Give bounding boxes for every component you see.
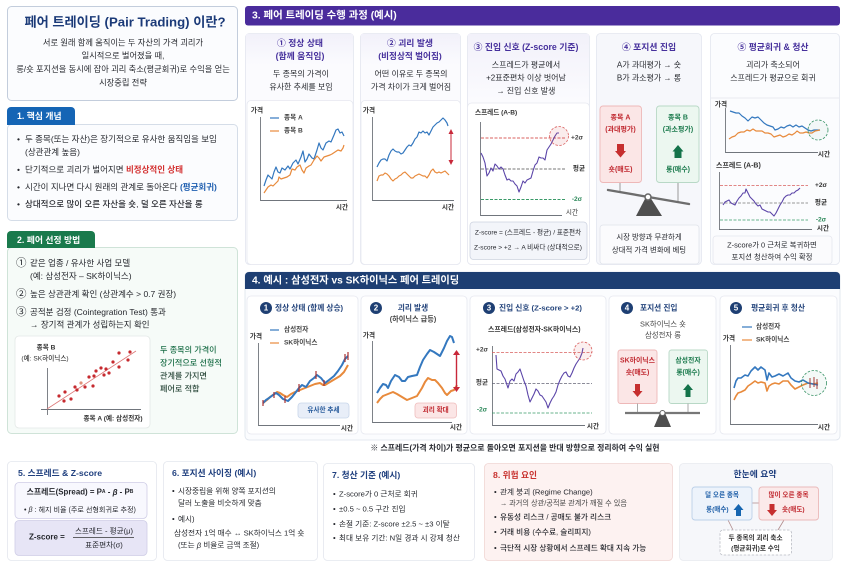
- chart: step 1: 종목 B: [284, 126, 303, 134]
- exit rule list: ±0.5 ~ 0.5 구간 진입: [339, 504, 406, 514]
- step 4 text: A가 과대평가 → 숏: [617, 60, 681, 70]
- step 5 title: ⑤ 평균회귀 & 청산: [737, 41, 809, 52]
- example step 4: [609, 296, 716, 434]
- long box: [656, 106, 699, 182]
- chart: example 3 spread: 평균: [476, 378, 488, 386]
- risk list: → 과거의 상관/공적분 관계가 깨질 수 있음: [500, 498, 627, 508]
- chart: example 5: 가격: [723, 334, 735, 342]
- example step 1: 시간: [341, 424, 353, 432]
- risk list: •: [494, 528, 497, 536]
- heading: section 4: 4. 예시 : 삼성전자 vs SK하이닉스 페어 트레이딩: [252, 274, 459, 286]
- example step 5: [720, 296, 837, 434]
- number badge 5: 5: [734, 304, 739, 312]
- example step 5 title: 평균회귀 후 청산: [751, 302, 805, 312]
- exit rule list: 손절 기준: Z-score ±2.5 ~ ±3 이탈: [339, 518, 450, 528]
- box: short leader: [759, 487, 818, 520]
- chart: step 3 spread: 스프레드 (A-B): [475, 108, 517, 116]
- position sizing text: 예시): [178, 514, 195, 524]
- example step 1 title: 정상 상태 (함께 상승): [275, 302, 344, 312]
- example step 3: [470, 296, 606, 434]
- spread formula box: • β : 헤지 비율 (주로 선형회귀로 추정): [24, 505, 136, 514]
- bullet list: 상대적으로 많이 오른 자산을 숏, 덜 오른 자산을 롱: [25, 199, 203, 209]
- chart: example 3 spread: 스프레드(삼성전자-SK하이닉스): [488, 324, 581, 334]
- summary connectors: [728, 503, 784, 530]
- chart: step 1: 시간: [336, 202, 348, 212]
- example step 2: 시간: [450, 422, 462, 432]
- chart: step 5 spread: 시간: [817, 224, 829, 232]
- box: profit from convergence: (평균회귀)로 수익: [731, 544, 780, 552]
- bullet list: [17, 134, 217, 209]
- chart: scatter plot: 종목 A (예: 삼성전자): [83, 414, 143, 422]
- box: profit from convergence: 두 종목의 괴리 축소: [728, 533, 783, 542]
- long box: 종목 B: [668, 114, 688, 122]
- z-score formula box: Z-score = (스프레드 - 평균) / 표준편차: [475, 228, 581, 236]
- step 3 text: [486, 60, 567, 96]
- z-score formula box: [470, 222, 587, 260]
- step 1 text: 유사한 추세를 보임: [269, 82, 333, 92]
- chart: example 5: 시간: [818, 422, 830, 432]
- step 2 title: [378, 37, 442, 61]
- arrow: divergence widening: [453, 350, 460, 392]
- risk list: 유동성 리스크 / 공매도 불가 리스크: [500, 512, 611, 522]
- chart: step 3 spread: 시간: [566, 208, 578, 216]
- box: buy laggard: [692, 487, 752, 520]
- selection steps: → 장기적 관계가 성립하는지 확인: [30, 320, 150, 330]
- arrow: divergence: [448, 129, 454, 165]
- step 1 text: [269, 68, 333, 92]
- position sizing text: 삼성전자 1억 매수 ↔ SK하이닉스 1억 숏: [174, 528, 304, 538]
- step 1 title: ① 정상 상태: [277, 37, 323, 48]
- heading 6: 6. 포지션 사이징 (예시): [172, 467, 256, 478]
- risk list: 극단적 시장 상황에서 스프레드 확대 지속 가능: [500, 542, 646, 552]
- short box: 숏(매도): [626, 368, 649, 376]
- example step 1: [247, 296, 358, 434]
- panel: step 3 entry signal: [468, 34, 590, 264]
- selection steps: 공적분 검정 (Cointegration Test) 통과: [30, 307, 166, 317]
- step 3 text: → 진입 신호 발생: [497, 86, 555, 96]
- example step 2 title: (하이닉스 급등): [390, 314, 437, 324]
- heading: core concept: [7, 107, 75, 125]
- panel: section 4 example: [245, 272, 840, 440]
- chart: step 3 spread: 평균: [573, 164, 585, 172]
- long box: [669, 350, 708, 404]
- panel: 6 position sizing: [164, 462, 318, 560]
- step 2 text: 어떤 이유로 두 종목의: [375, 68, 447, 78]
- chart: scatter plot: 종목 B: [37, 344, 56, 352]
- selection steps: ①: [16, 257, 27, 269]
- bullet list: •: [17, 199, 20, 209]
- box: buy laggard: 덜 오른 종목: [705, 490, 739, 499]
- intro text: [16, 38, 230, 88]
- heading 8: 8. 위험 요인: [493, 469, 537, 480]
- step 3 text: +2표준편차 이상 벗어남: [486, 72, 567, 82]
- chart: step 5 prices: 가격: [715, 100, 727, 108]
- z-score formula box: [15, 520, 147, 556]
- scatter explanation: 관계를 가지면: [160, 370, 207, 380]
- panel: 1 core concept: [7, 107, 238, 220]
- risk list: 거래 비용 (수수료, 슬리피지): [500, 526, 591, 536]
- selection steps: ③: [16, 306, 27, 318]
- panel: step 4 position: [596, 34, 702, 264]
- step 3 text: 스프레드가 평균에서: [492, 60, 560, 70]
- chart: scatter plot: (예: SK하이닉스): [21, 354, 69, 362]
- chart: example 1: [250, 324, 348, 426]
- chart: example 3 spread: 시간: [587, 422, 599, 430]
- panel: 8 risk factors: [484, 464, 672, 560]
- panel: 5 spread and z-score: [8, 462, 156, 560]
- short box: [600, 106, 642, 182]
- short box: SK하이닉스: [620, 356, 656, 364]
- number badge 3: 3: [487, 304, 492, 312]
- step 4 text: [617, 60, 681, 82]
- chart: example 5: SK하이닉스: [756, 334, 789, 344]
- chart: example 1: 가격: [250, 332, 262, 340]
- long box: (과소평가): [663, 124, 693, 134]
- heading: section 3: 3. 페어 트레이딩 수행 과정 (예시): [252, 8, 397, 22]
- title: 페어 트레이딩 (Pair Trading) 이란?: [24, 14, 226, 30]
- step 5 note: [713, 236, 832, 264]
- chart: example 2: 가격: [363, 330, 375, 340]
- z-score formula box: 스프레드 - 평균(μ): [75, 526, 134, 536]
- chart: step 1: 가격: [251, 106, 263, 114]
- badge: similar trend: 유사한 추세: [307, 405, 340, 414]
- intro text: 롱/숏 포지션을 동시에 잡아 괴리 축소(평균회귀)로 수익을 얻는: [16, 64, 230, 74]
- step 1 title: [276, 37, 324, 61]
- badge: divergence widening: 괴리 확대: [423, 405, 449, 414]
- chart: step 2: 가격: [363, 106, 375, 114]
- chart: step 5 prices: 시간: [818, 150, 830, 158]
- heading: section 4: [245, 272, 840, 289]
- risk list: [494, 486, 646, 552]
- step 5 note: 포지션 청산하여 수익 확정: [732, 252, 812, 262]
- exit rule list: Z-score가 0 근처로 회귀: [339, 488, 418, 498]
- box: short leader: 숏(매도): [782, 504, 805, 514]
- scatter explanation: 페어로 적합: [160, 384, 200, 394]
- panel: step 5 mean reversion: [710, 34, 840, 264]
- risk list: •: [494, 512, 497, 522]
- short box: [618, 350, 657, 404]
- intro text: 서로 원래 함께 움직이는 두 자산의 가격 괴리가: [43, 38, 204, 48]
- long box: 롱(매수): [676, 368, 700, 376]
- step 5 note: Z-score가 0 근처로 복귀하면: [727, 240, 817, 250]
- number badge 1: 1: [264, 304, 269, 312]
- chart: step 1: 종목 A: [284, 114, 303, 122]
- intro text: 시장중립 전략: [99, 78, 147, 88]
- chart: example 1: 삼성전자: [284, 324, 308, 334]
- bullet list: •: [17, 182, 20, 192]
- chart: example 3 spread: [476, 324, 599, 430]
- panel: summary: [680, 464, 832, 560]
- chart: example 1: SK하이닉스: [284, 338, 317, 346]
- spread formula box: [15, 482, 147, 518]
- example step 4 text: SK하이닉스 숏: [640, 320, 686, 328]
- balance beam: [608, 182, 689, 216]
- selection steps: [16, 257, 176, 330]
- number badge 4: 4: [625, 304, 630, 312]
- z-score formula box: Z-score =: [29, 532, 65, 542]
- step 1 text: 두 종목의 가격이: [273, 68, 329, 78]
- step 4 text: B가 과소평가 → 롱: [617, 72, 681, 82]
- heading 7: 7. 청산 기준 (예시): [332, 469, 400, 480]
- panel: step 1 normal: [246, 34, 354, 264]
- heading 5: 5. 스프레드 & Z-score: [18, 467, 102, 478]
- step 2 title: ② 괴리 발생: [387, 37, 433, 48]
- position sizing text: (또는 β 비율로 금액 조절): [178, 540, 260, 550]
- panel: 7 exit rules: [324, 464, 474, 560]
- bullet list: 두 종목(또는 자산)은 장기적으로 유사한 움직임을 보임: [25, 134, 217, 144]
- chart: step 5 spread: 스프레드 (A-B): [716, 160, 761, 170]
- chart: example 5: [723, 322, 830, 432]
- exit rule list: •: [333, 504, 336, 514]
- heading: core concept: 1. 핵심 개념: [17, 110, 62, 121]
- short box: 종목 A: [611, 114, 630, 122]
- step 4 title: ④ 포지션 진입: [622, 41, 676, 52]
- summary heading: 한눈에 요약: [734, 468, 776, 479]
- bullet list: •: [17, 134, 20, 144]
- risk list: •: [494, 544, 497, 552]
- bullet list: (상관관계 높음): [25, 147, 80, 157]
- chart: step 1: [247, 100, 353, 264]
- exit rule list: •: [333, 490, 336, 498]
- z-score formula box: 표준편차(σ): [85, 540, 123, 550]
- panel: 2 pair selection: [7, 231, 238, 434]
- chart: step 5 spread: [716, 160, 829, 232]
- box: buy laggard: 롱(매수): [706, 504, 729, 514]
- risk list: •: [494, 488, 497, 496]
- selection steps: ②: [16, 288, 27, 300]
- chart: step 5 spread: +2σ: [815, 182, 828, 189]
- box: profit from convergence: [720, 530, 792, 555]
- chart: example 3 spread: -2σ: [477, 406, 488, 414]
- risk list: 관계 붕괴 (Regime Change): [500, 486, 593, 496]
- example step 3 title: 진입 신호 (Z-score > +2): [499, 302, 582, 312]
- chart: step 2: 시간: [442, 202, 454, 212]
- chart: step 5 spread: 평균: [815, 198, 827, 206]
- exit rule list: 최대 보유 기간: N일 경과 시 강제 청산: [339, 532, 460, 542]
- position sizing text: •: [172, 486, 175, 496]
- scatter explanation: 장기적으로 선형적: [160, 358, 222, 368]
- bullet list: •: [17, 164, 20, 174]
- step 4 note: [600, 225, 699, 264]
- panel: intro title: [8, 6, 238, 100]
- position sizing text: 시장중립을 위해 양쪽 포지션의: [178, 486, 276, 496]
- heading: section 3: [245, 6, 840, 26]
- chart: step 3 spread: [468, 103, 590, 264]
- step 3 title: ③ 진입 신호 (Z-score 기준): [474, 41, 578, 52]
- number badge 2: 2: [374, 304, 379, 312]
- step 2 text: [371, 68, 451, 92]
- exit rule list: •: [333, 534, 336, 542]
- balance beam: [625, 404, 700, 427]
- long box: 롱(매수): [666, 164, 690, 174]
- position sizing text: •: [172, 514, 175, 524]
- chart: step 5 prices: [711, 98, 839, 158]
- short box: 숏(매도): [609, 164, 632, 174]
- position sizing text: 달러 노출을 비슷하게 맞춤: [178, 498, 262, 508]
- chart: example 3 spread: +2σ: [476, 346, 489, 354]
- step 4 note: 시장 방향과 무관하게: [616, 232, 682, 242]
- example step 2: [361, 296, 467, 434]
- step 5 text: [730, 60, 816, 82]
- chart: step 3 spread: -2σ: [572, 196, 583, 203]
- exit rule list: •: [333, 520, 336, 528]
- heading: pair selection: [7, 231, 95, 248]
- panel: step 2 divergence: [360, 34, 460, 264]
- example step 4 text: [640, 320, 686, 340]
- example step 2 title: [390, 302, 437, 324]
- exit rule list: [333, 488, 460, 542]
- chart: step 3 spread: +2σ: [571, 134, 584, 142]
- chart: scatter plot: [15, 336, 150, 428]
- step 2 text: 가격 차이가 크게 벌어짐: [371, 82, 451, 92]
- example step 2 title: 괴리 발생: [398, 302, 428, 312]
- spread formula box: 스프레드(Spread) = PA - β - PB: [27, 486, 134, 496]
- heading: pair selection: 2. 페어 선정 방법: [17, 234, 80, 245]
- chart: example 5: 삼성전자: [756, 322, 780, 330]
- example step 4 text: 삼성전자 롱: [645, 330, 681, 340]
- step 2 title: (비정상적 벌어짐): [378, 50, 442, 61]
- scatter explanation: [160, 344, 222, 394]
- bullet list: 단기적으로 괴리가 벌어지면 비정상적인 상태: [25, 164, 183, 174]
- selection steps: 높은 상관관계 확인 (상관계수 > 0.7 권장): [30, 289, 176, 299]
- z-score formula box: Z-score > +2 → A 비싸다 (상대적으로): [474, 242, 582, 252]
- bullet list: 시간이 지나면 다시 원래의 관계로 돌아온다 (평균회귀): [25, 182, 217, 192]
- note under section 4: ※ 스프레드(가격 차이)가 평균으로 돌아오면 포지션을 반대 방향으로 정리하여 수익 실현: [370, 442, 660, 452]
- box: short leader: 많이 오른 종목: [768, 490, 809, 499]
- chart: step 2: [361, 100, 460, 264]
- chart: step 5 spread: -2σ: [816, 216, 827, 224]
- step 5 text: 스프레드가 평균으로 회귀: [730, 72, 816, 82]
- example step 4 title: 포지션 진입: [640, 302, 678, 312]
- step 4 note: 상대적 가격 변화에 베팅: [612, 246, 686, 254]
- step 5 text: 괴리가 축소되어: [746, 60, 800, 70]
- short box: (과대평가): [605, 124, 636, 134]
- intro text: 일시적으로 벌어졌을 때,: [82, 50, 164, 60]
- selection steps: 같은 업종 / 유사한 사업 모델: [30, 258, 130, 268]
- position sizing text: [172, 486, 304, 550]
- step 1 title: (함께 움직임): [276, 50, 324, 61]
- long box: 삼성전자: [675, 356, 701, 364]
- scatter explanation: 두 종목의 가격이: [160, 344, 217, 354]
- selection steps: (예: 삼성전자 – SK하이닉스): [30, 271, 132, 281]
